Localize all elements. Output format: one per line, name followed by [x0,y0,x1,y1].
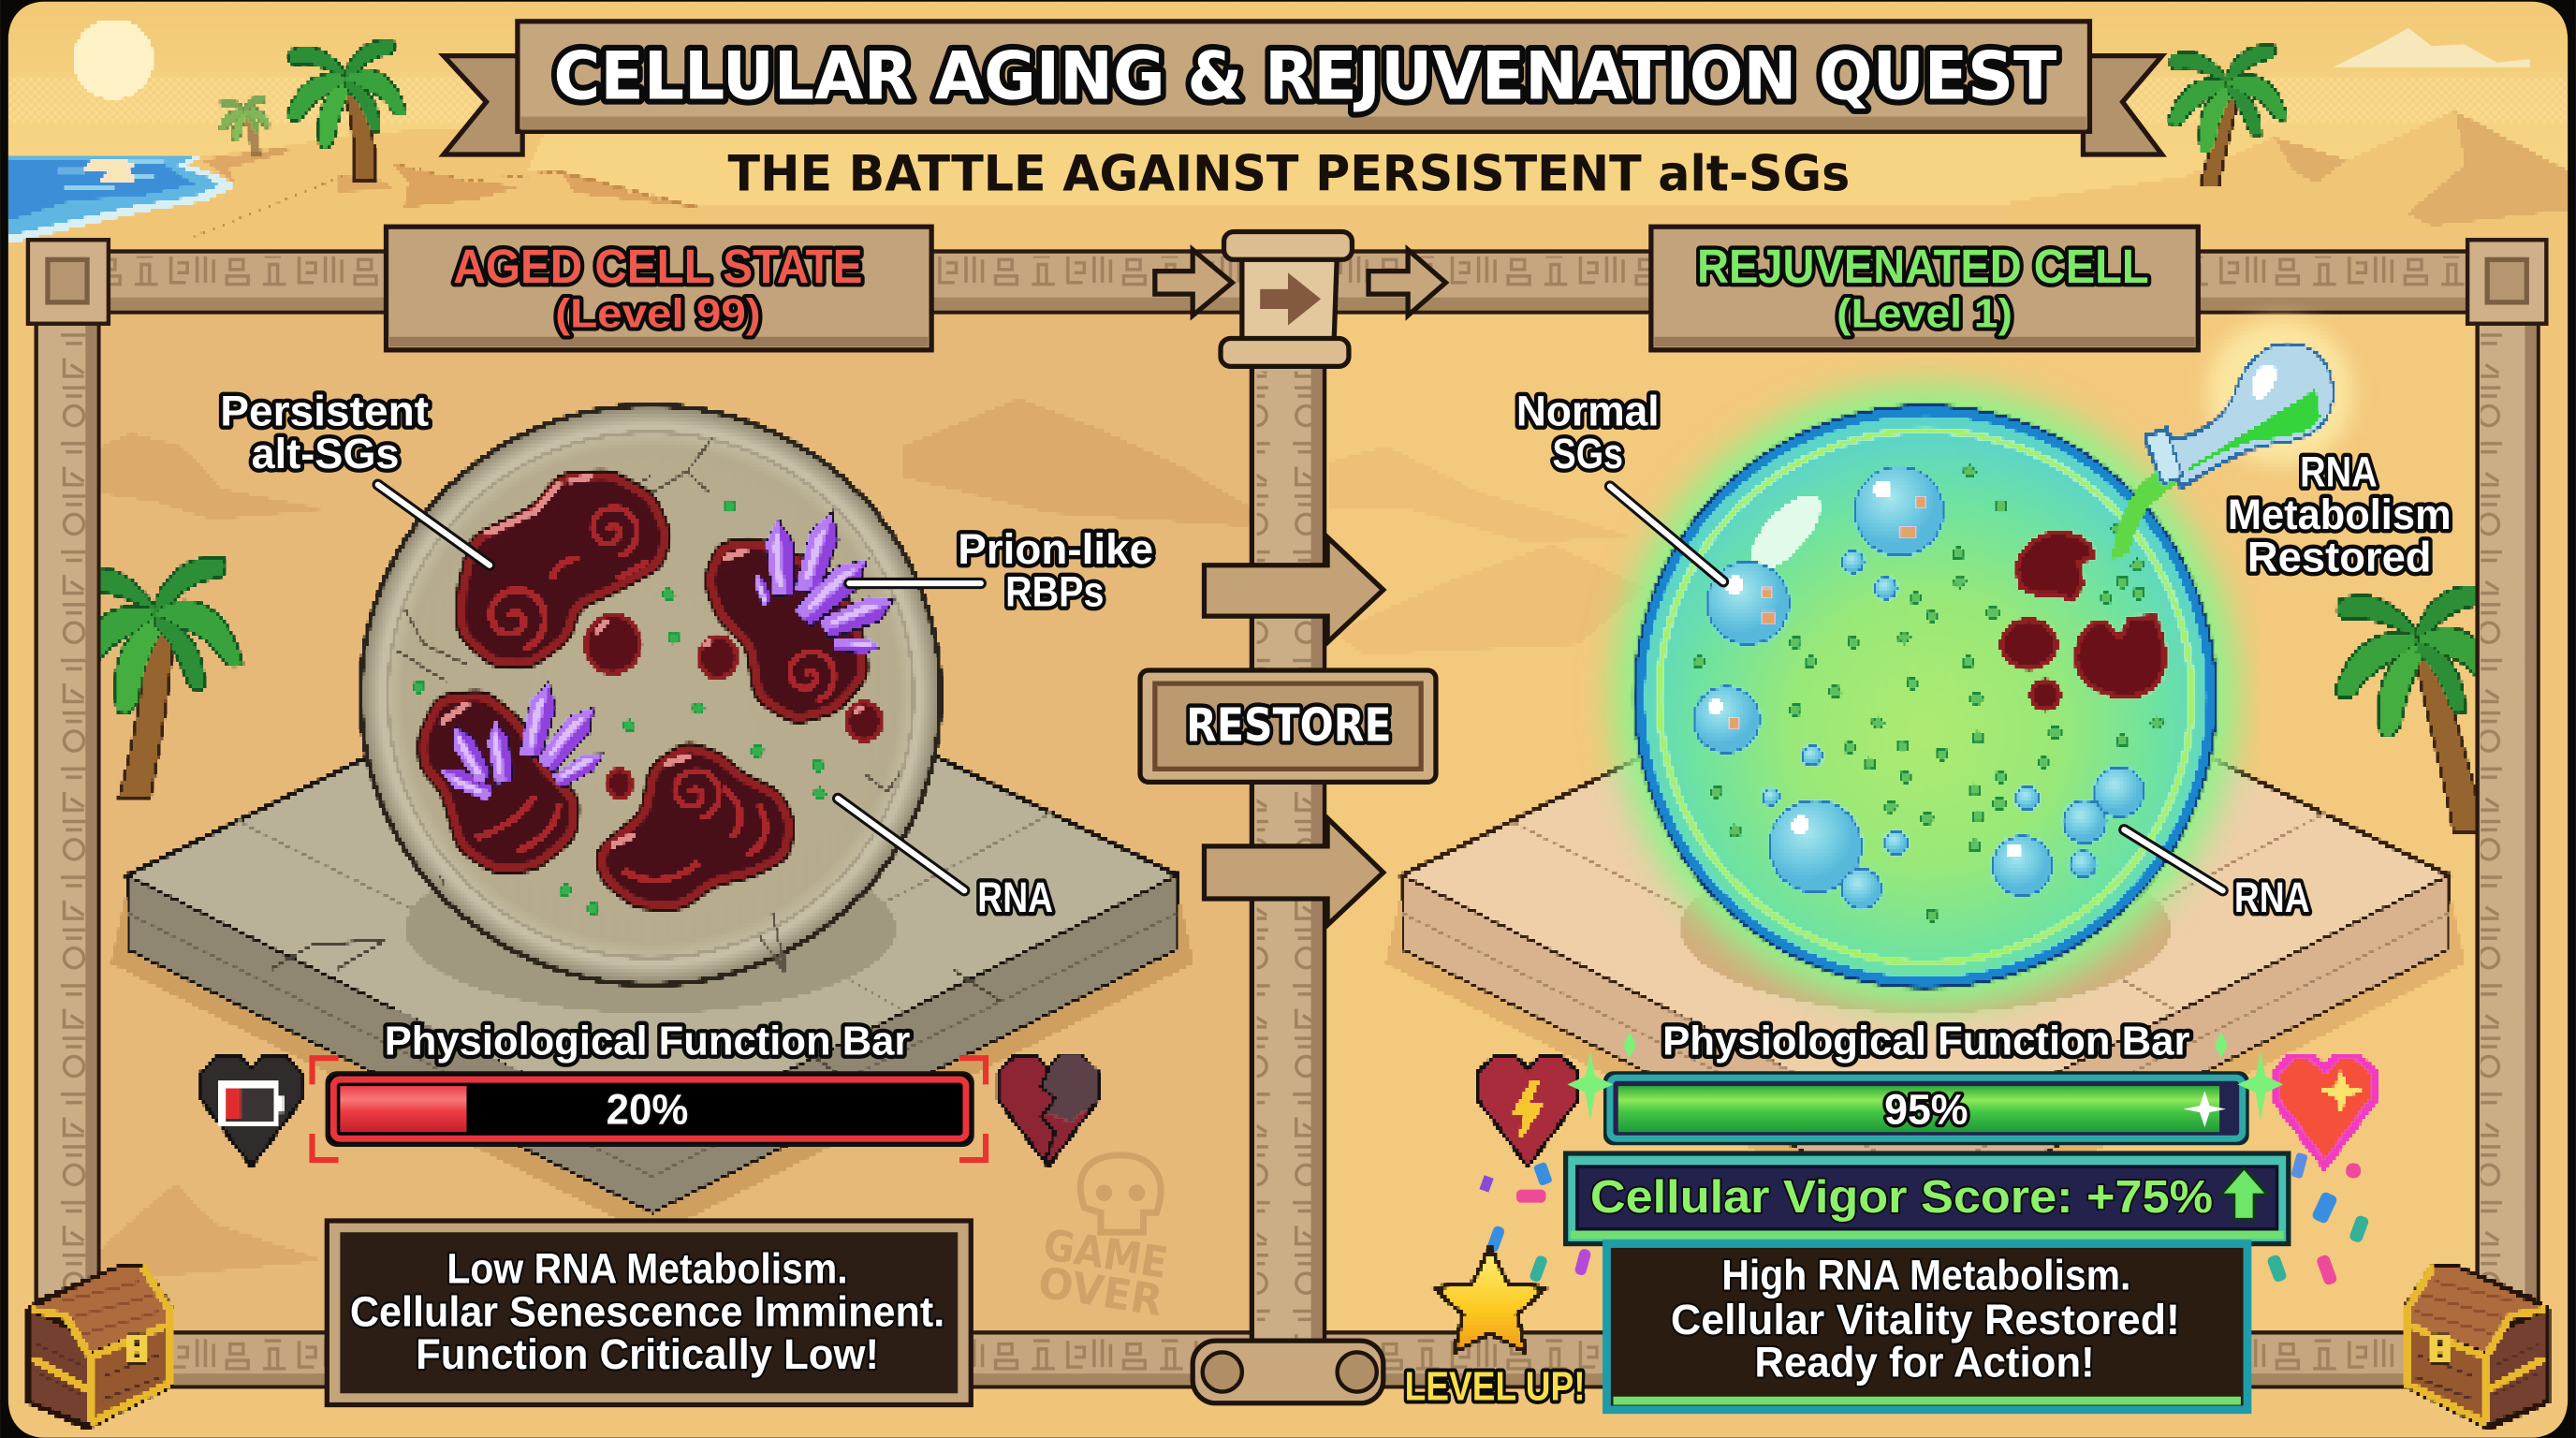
alt-SG blob 4 details [611,756,766,880]
palm: right [2335,586,2501,831]
icon: star [1436,1249,1544,1351]
banner shade [520,117,2086,130]
title banner [444,22,2162,154]
frame: right pillar [2478,312,2539,1331]
header: aged cell state: (Level 99) [555,290,761,336]
right status box [1606,1244,2247,1410]
panel: right background [1288,279,2511,1364]
bar label: Physiological Function Bar [1662,1019,2190,1064]
glow [1613,385,2237,1009]
sparkles green [1567,1032,2284,1121]
header: rejuvenated cell [1651,227,2198,350]
stream [2113,463,2182,559]
left panel dunes [102,399,1251,1282]
icon: treasure chest left [28,1265,171,1428]
highlight [1740,485,1831,580]
label: persistent alt-SGs [220,388,429,477]
icon: lightning heart [1479,1056,1577,1165]
bar fill [340,1086,466,1132]
sun [74,20,153,98]
aggregate red rim [420,473,866,907]
background: sky [0,0,2576,230]
palm: top left [287,40,406,181]
confetti [1479,1152,2370,1286]
subtitle: THE BATTLE AGAINST PERSISTENT alt-SGs [728,146,1850,203]
frame: left pillar [37,312,98,1331]
label: normal SGs [1516,388,1660,477]
palm: small distant [220,96,270,157]
header: rejuvenated cell: (Level 1) [1837,290,2012,336]
pointer: prion-like RBPs [849,580,981,587]
sparkle at bar end [2183,1091,2226,1127]
game over watermark: OVER [1035,1257,1166,1326]
label: RNA right: RNA [2234,873,2310,921]
background: dithered haze band [0,77,2576,124]
aggregate outline [420,473,866,907]
pointer: RNA left [838,799,964,890]
game over watermark [1035,1155,1171,1326]
right cell [1613,385,2237,1009]
flask glass [2165,344,2333,486]
left status box: Function Critically Low! [416,1330,879,1378]
frame: bottom beam [91,1332,2489,1387]
restore button [1140,670,1436,782]
title text: CELLULAR AGING & REJUVENATION QUEST [554,37,2056,114]
right status box: Cellular Vitality Restored! [1671,1296,2180,1343]
left status box: Low RNA Metabolism. [446,1245,848,1293]
ribbon left [444,56,522,154]
alt-SG blob 2 details [723,550,834,700]
cell body [361,405,940,984]
vigor score box: Cellular Vigor Score: +75% [1590,1172,2213,1223]
big arrow upper [1204,537,1383,642]
right function bar [1605,1019,2247,1143]
potion flask [2113,320,2352,559]
pointer: normal SGs [1610,486,1723,581]
arrow up [2221,1168,2267,1219]
label: prion-like RBPs: Prion-like [958,525,1153,573]
left status box [327,1221,971,1405]
label: RNA metabolism restored: Metabolism [2228,491,2452,538]
bubble cargo [1730,498,1925,729]
pointer: RNA right [2124,829,2223,890]
left function bar [313,1019,986,1160]
panel: left background [66,279,1281,1364]
bar value: 95% [1884,1085,1969,1133]
game over watermark: GAME [1040,1220,1171,1288]
frame: corner block left [28,240,109,324]
alt-SG blob 1 details [487,477,648,649]
label: persistent alt-SGs: Persistent [220,388,429,435]
bar frame [1605,1073,2247,1143]
pedestal: right [1386,618,2465,1236]
label: prion-like RBPs: RBPs [1005,568,1104,616]
small aggregates [585,614,883,799]
icon: broken heart [999,1056,1097,1165]
bar value: 20% [607,1085,688,1133]
bar frame [327,1073,973,1145]
label: normal SGs: SGs [1553,430,1623,477]
header: rejuvenated cell: REJUVENATED CELL [1697,240,2149,293]
cloud [2333,28,2530,67]
frame: top beam [91,252,2489,312]
palm: left [70,558,242,797]
dissolving aggregates [2001,532,2165,710]
bar label: Physiological Function Bar [385,1019,910,1064]
scroll with arrow [1221,231,1352,366]
skull [1080,1155,1161,1232]
alt-SG blob 3 details [440,703,559,851]
palm: top right [2169,46,2287,185]
dunes top right [2011,111,2569,230]
vigor score box [1566,1153,2289,1244]
left status box: Cellular Senescence Imminent. [350,1287,944,1335]
level up text: LEVEL UP! [1405,1363,1586,1409]
prion-like crystals 2 [752,508,900,655]
label: RNA metabolism restored: RNA [2300,448,2378,495]
label: RNA metabolism restored [2228,448,2452,581]
restore button: RESTORE [1186,698,1392,753]
banner plate [518,22,2089,131]
warning brackets [313,1058,986,1160]
normal SGs [1693,466,2144,909]
small arrow right of scroll [1368,250,1445,315]
right status box: Ready for Action! [1754,1339,2095,1387]
flask mouth [2146,430,2183,483]
small arrow left of scroll [1155,250,1232,315]
beach and dunes top left [8,128,707,246]
pedestal: left [111,618,1193,1236]
central column [1251,365,1325,1344]
frame: corner block right [2467,240,2546,324]
label: RNA left: RNA [977,873,1053,921]
cracks [394,435,900,969]
RNA granule dots [1693,466,2163,921]
big arrow lower [1204,818,1383,925]
pointer: persistent alt-SGs [378,485,490,565]
prion-like crystals 3 [438,680,608,802]
right panel dunes [1329,447,1643,654]
RNA specks [413,500,826,915]
label: RNA metabolism restored: Restored [2247,534,2431,581]
header: aged cell state: AGED CELL STATE [453,240,862,293]
small aggregate highlights [594,621,862,712]
icon: sparkling heart [2276,1056,2374,1165]
potion liquid [2188,388,2321,473]
header: aged cell state [386,227,931,350]
ribbon right [2083,56,2162,154]
icon: treasure chest right [2405,1265,2548,1428]
bar fill [1618,1086,2219,1132]
left cell [361,405,940,984]
sea [8,157,235,243]
bottom scroll roll [1193,1341,1383,1403]
cell body [1640,411,2211,983]
aggregate dark core [420,473,866,907]
icon: battery heart [202,1056,300,1165]
label: prion-like RBPs [958,525,1153,616]
right status box: High RNA Metabolism. [1721,1252,2130,1299]
label: normal SGs: Normal [1516,388,1660,435]
flask glow [2208,320,2352,465]
bubble highlights [1708,481,2021,858]
label: persistent alt-SGs: alt-SGs [252,430,400,477]
